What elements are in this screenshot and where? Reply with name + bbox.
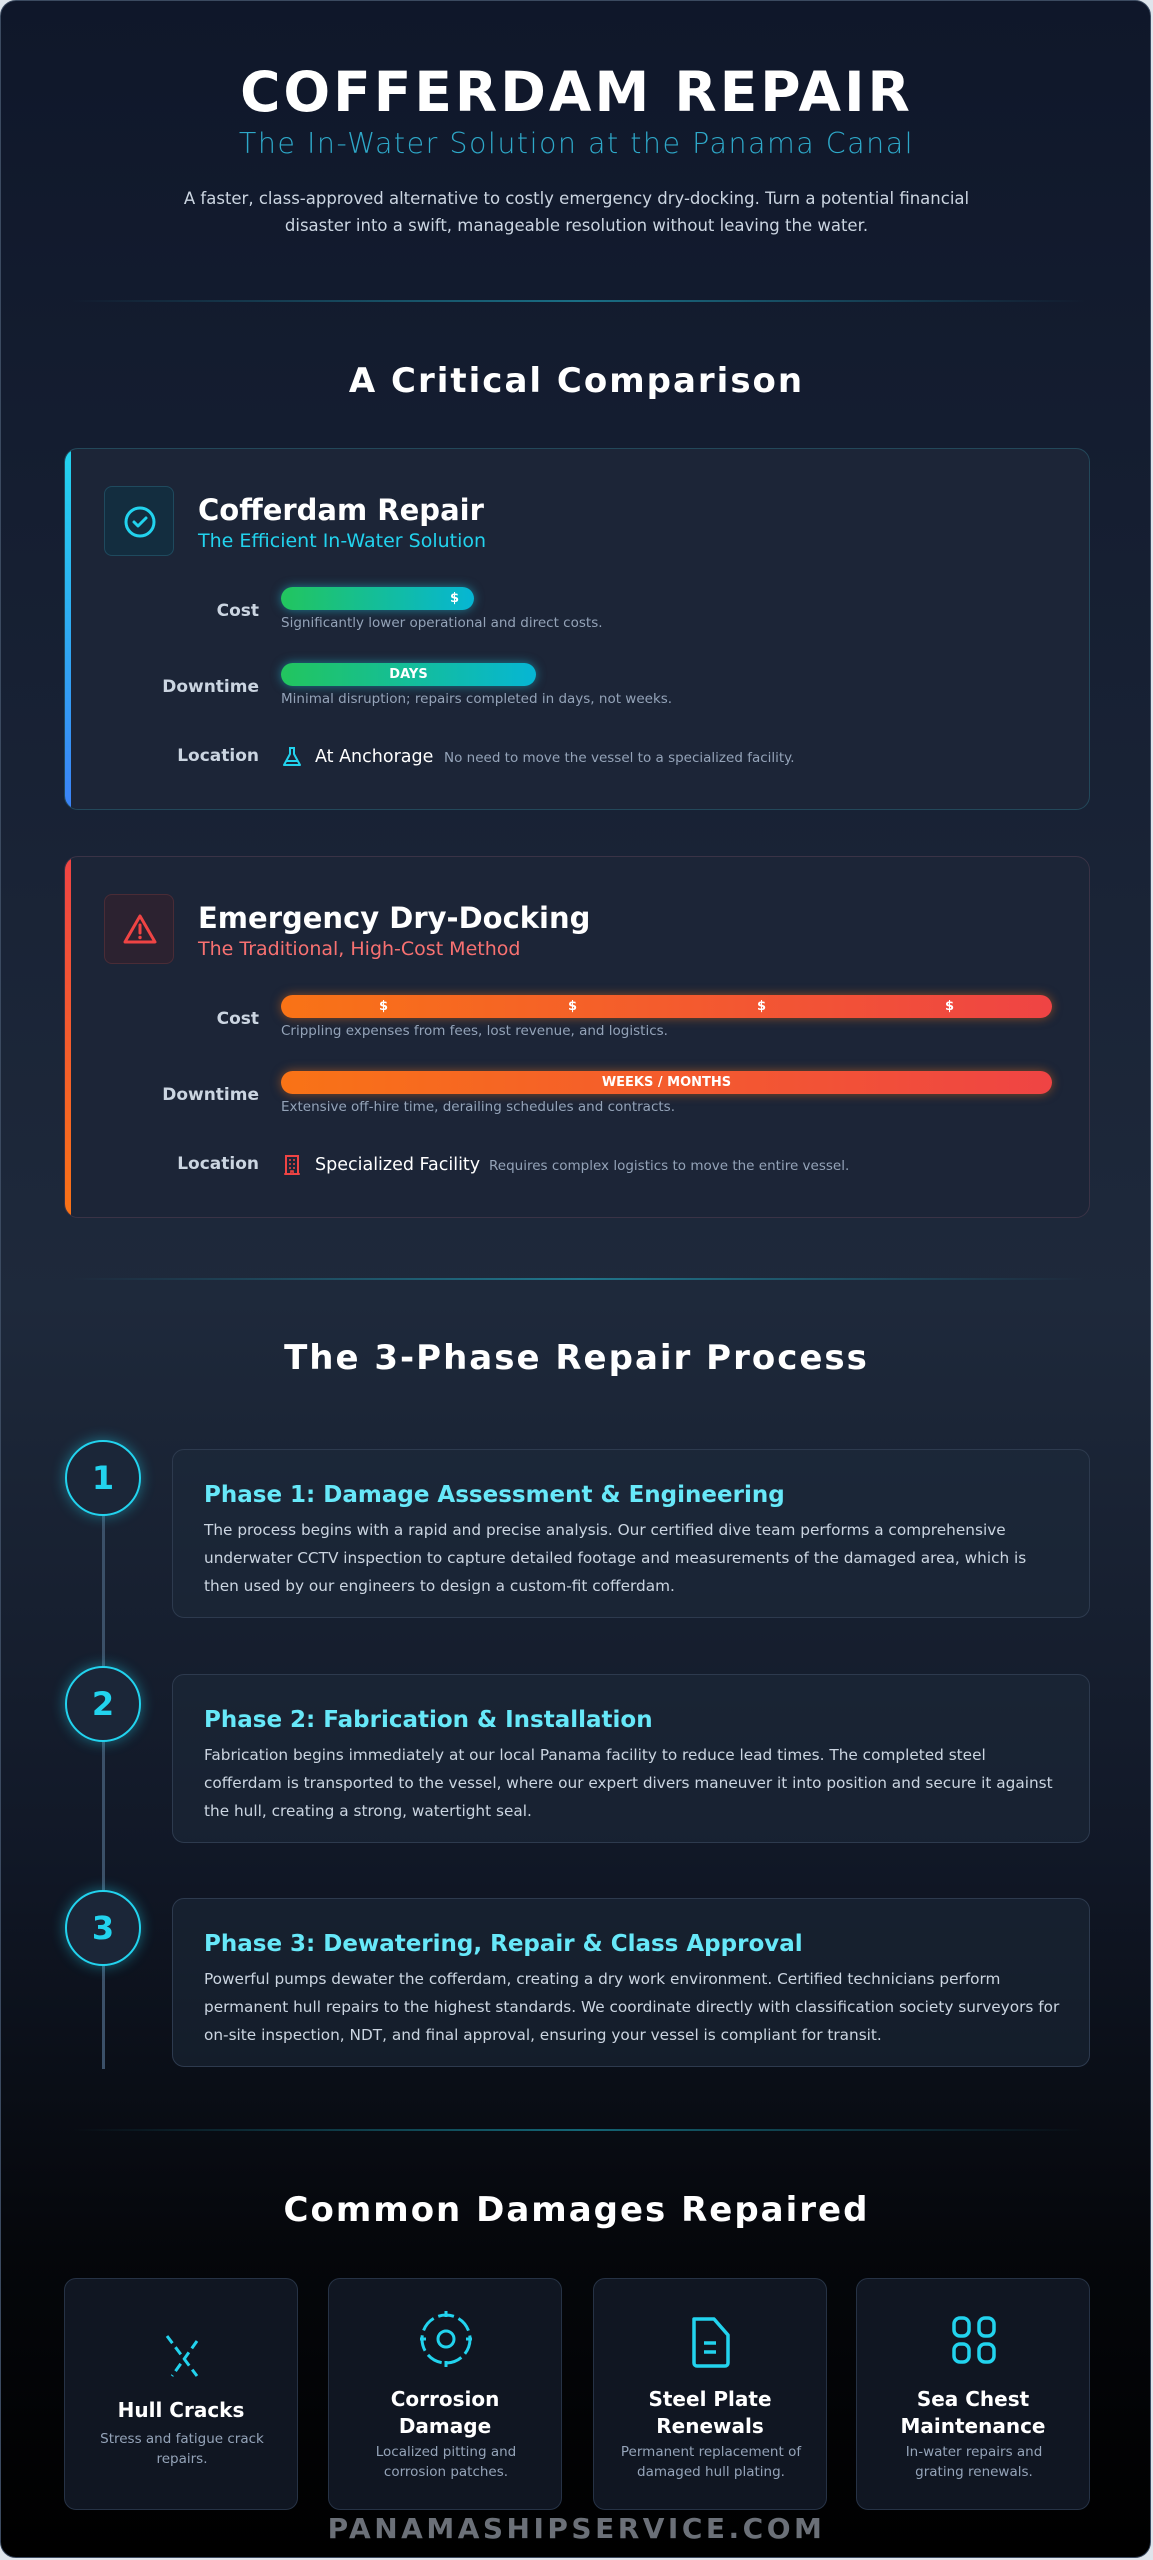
row: location [177,746,795,767]
row: location: Requires complex logistics to move the entire vessel. [489,1158,849,1174]
intro text: A faster, class-approved alternative to costly emergency dry-docking. Turn a potential financial [184,189,969,208]
row: location: Specialized Facility [315,1155,480,1175]
row: downtime: DAYS [389,667,428,682]
row: cost: $ [757,999,766,1014]
damage card: sea chest: grating renewals. [915,2464,1033,2480]
intro text: disaster into a swift, manageable resolution without leaving the water. [285,216,868,235]
card subtitle: The Efficient In-Water Solution [198,530,486,552]
phase 2 card: Fabrication begins immediately at our local Panama facility to reduce lead times. The completed steel cofferdam is transported to the vessel, where our expert divers maneuver it into position and secure it against the hull, creating a strong, watertight seal. [204,1746,1053,1820]
damage card: corrosion: Damage [399,2414,491,2438]
icon: check circle [104,486,174,556]
phase 2 card: Phase 2: Fabrication & Installation [204,1707,653,1733]
panel: emergency dry-docking [64,856,1090,1218]
icon: flask [283,747,301,766]
footer: PANAMASHIPSERVICE.COM [328,2512,825,2545]
row: cost: Crippling expenses from fees, lost revenue, and logistics. [281,1023,668,1039]
damage card: corrosion [328,2278,562,2510]
damage card: hull cracks: Hull Cracks [118,2398,244,2422]
phase 3 marker [65,1890,141,1966]
phase 1 marker [65,1440,141,1516]
phase 1 card: The process begins with a rapid and precise analysis. Our certified dive team performs a comprehensive underwater CCTV inspection to capture detailed footage and measurements of the damaged area, which is then used by our engineers to design a custom-fit cofferdam. [204,1521,1026,1595]
damage card: sea chest [856,2278,1090,2510]
row: cost: Cost [217,1009,259,1029]
row: downtime: Minimal disruption; repairs completed in days, not weeks. [281,691,672,707]
heading: process: The 3-Phase Repair Process [284,1338,869,1378]
row: location: Location [177,1154,259,1174]
damage card: steel plate: Permanent replacement of damaged hull plating. [621,2444,801,2480]
icon: warning [104,894,174,964]
row: location [177,1154,849,1175]
row: cost: $ [379,999,388,1014]
row: downtime: WEEKS / MONTHS [602,1075,731,1090]
row: downtime: Extensive off-hire time, derailing schedules and contracts. [281,1099,675,1115]
phase 2 marker [65,1666,141,1742]
row: downtime: Downtime [162,677,259,697]
damage card: sea chest: Maintenance [900,2414,1046,2438]
damage card: hull cracks [64,2278,298,2510]
row: downtime: Downtime [162,1085,259,1105]
damage card: steel plate [593,2278,827,2510]
row: location: No need to move the vessel to a specialized facility. [444,750,795,766]
icon: corrosion [420,2311,472,2367]
row: cost: Significantly lower operational and direct costs. [281,615,603,631]
panel: cofferdam repair [64,448,1090,810]
phase 3 card [172,1898,1090,2067]
damage card: sea chest: Sea Chest [917,2387,1029,2411]
phase 3 card: Powerful pumps dewater the cofferdam, creating a dry work environment. Certified technicians perform permanent hull repairs to the highest standards. We coordinate directly with classification society surveyors for on-site inspection, NDT, and final approval, ensuring your vessel is compliant for transit. [204,1970,1059,2044]
row: cost [217,580,603,631]
row: cost: $ [568,999,577,1014]
subtitle: The In-Water Solution at the Panama Canal [239,127,914,160]
phase 1 card [172,1449,1090,1618]
damage card: hull cracks: Stress and fatigue crack repairs. [100,2431,264,2467]
damage card: steel plate: Steel Plate [648,2387,772,2411]
row: cost [217,988,1058,1039]
icon: building [284,1155,300,1175]
card title: Emergency Dry-Docking [198,901,590,935]
row: cost: $ [450,591,459,606]
icon: plate [692,2317,730,2368]
row: cost: $ [945,999,954,1014]
icon: crack [166,2335,198,2377]
phase 2 card [172,1674,1090,1843]
damage card: sea chest: In-water repairs and [906,2444,1042,2460]
phase 3 card: Phase 3: Dewatering, Repair & Class Approval [204,1931,803,1957]
card subtitle: The Traditional, High-Cost Method [198,938,520,960]
damage card: corrosion: Corrosion [391,2387,499,2411]
row: cost: Cost [217,601,259,621]
title: COFFERDAM REPAIR [240,60,913,124]
heading: damages: Common Damages Repaired [284,2190,869,2230]
phase 1 card: Phase 1: Damage Assessment & Engineering [204,1482,785,1508]
heading: comparison: A Critical Comparison [349,361,804,401]
phase 3 marker: 3 [92,1909,114,1947]
timeline line [102,1478,105,2069]
row: downtime [162,1064,1058,1115]
intro text [184,189,969,235]
row: location: At Anchorage [315,747,433,767]
row: location: Location [177,746,259,766]
phase 1 marker: 1 [92,1459,114,1497]
card title: Cofferdam Repair [198,493,484,527]
phase 2 marker: 2 [92,1685,114,1723]
damage card: steel plate: Renewals [656,2414,764,2438]
row: downtime [162,656,672,707]
damage card: corrosion: Localized pitting and corrosion patches. [376,2444,516,2480]
icon: grid [952,2316,996,2364]
